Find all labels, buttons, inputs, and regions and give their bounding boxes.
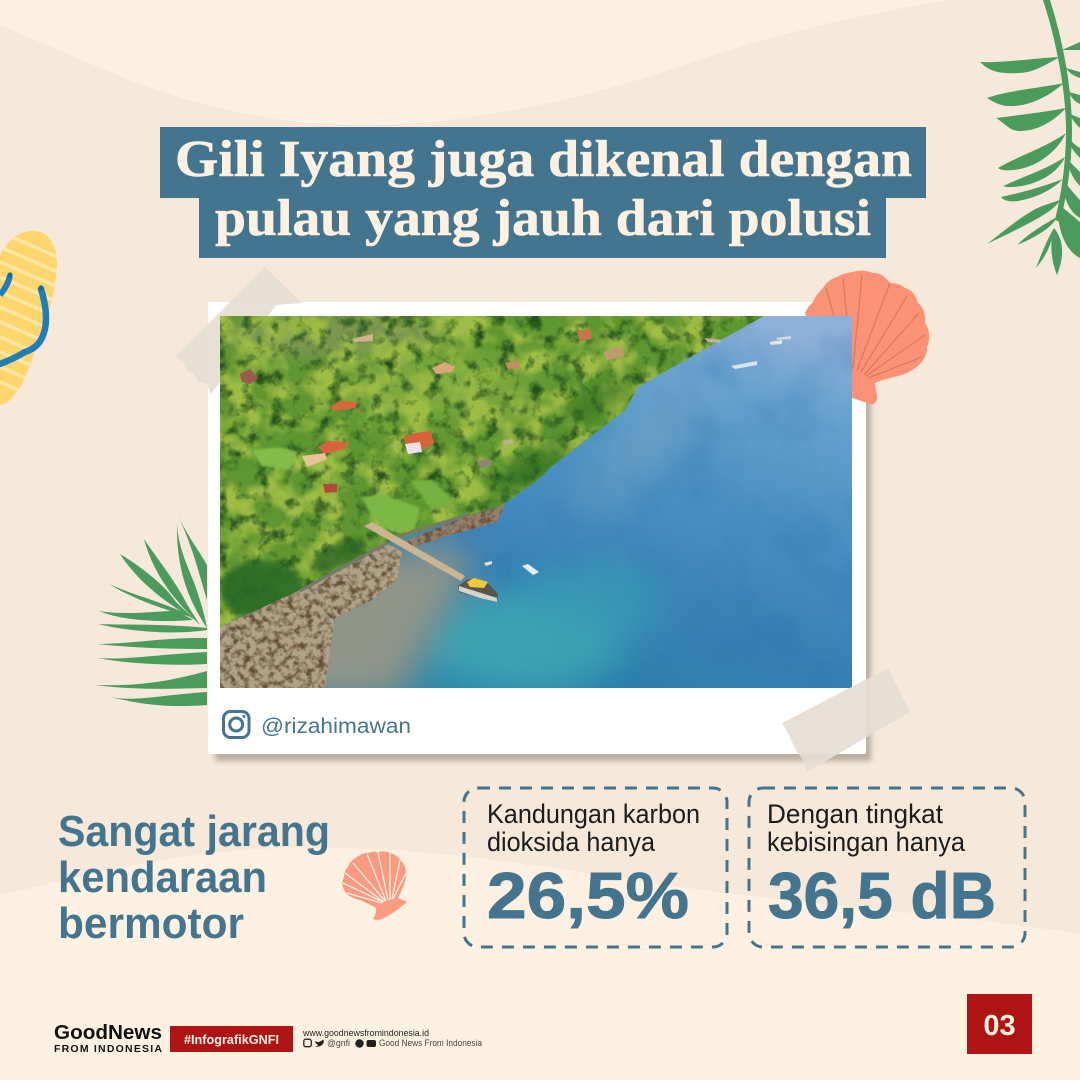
decoration: small shell: [342, 851, 407, 920]
shallow water: [220, 545, 470, 700]
dark shoreline trees: [220, 560, 304, 620]
moored boat: [458, 578, 498, 602]
lawns: [252, 447, 453, 532]
photo: aerial view of the island coast: [220, 313, 852, 700]
decoration: palm leaf left: [95, 516, 207, 706]
page number: [967, 994, 1032, 1054]
icon: youtube: [366, 1040, 376, 1047]
pier: [364, 522, 465, 581]
stat panel: noise level: 36,5 dB: [768, 859, 996, 932]
stat panel: carbon dioxide: [464, 788, 727, 947]
title: [160, 127, 926, 258]
page number: 03: [983, 1010, 1016, 1042]
footer logo: [54, 1022, 162, 1055]
heading: rarely motor vehicles: kendaraan: [58, 853, 267, 902]
stat panel: noise level: Dengan tingkat: [767, 799, 943, 829]
title line 1: Gili Iyang juga dikenal dengan: [175, 131, 912, 188]
hashtag badge: [170, 1026, 293, 1052]
footer contact info: @gnfi: [327, 1038, 350, 1049]
stat panel: carbon dioxide: Kandungan karbon: [487, 799, 700, 829]
stat panel: carbon dioxide: dioksida hanya: [487, 827, 656, 857]
houses: [240, 329, 624, 493]
footer logo: GoodNews: [54, 1022, 162, 1044]
sea: [220, 316, 852, 688]
title line 2: pulau yang jauh dari polusi: [215, 190, 871, 247]
decoration: large shell: [805, 271, 929, 404]
photo card shadow: [215, 310, 871, 761]
title line 1 band: [160, 127, 926, 198]
decoration: palm leaf top right: [980, 0, 1080, 275]
land vegetation: [220, 313, 780, 636]
footer contact info: Good News From Indonesia: [379, 1038, 483, 1049]
heading: rarely motor vehicles: bermotor: [58, 899, 244, 948]
footer contact info: www.goodnewsfromindonesia.id: [302, 1028, 429, 1039]
icon: facebook: [355, 1039, 364, 1048]
hashtag badge: #InfografikGNFI: [184, 1032, 279, 1047]
stat panel: noise level: [749, 788, 1025, 947]
icon: twitter: [315, 1040, 324, 1047]
title line 2 band: [199, 197, 886, 258]
tape: top left: [175, 267, 302, 394]
photo card: [208, 302, 866, 754]
photo credit: @rizahimawan: [261, 715, 411, 738]
reef rocks: [220, 500, 510, 690]
heading: rarely motor vehicles: [58, 807, 330, 948]
stat panel: carbon dioxide: 26,5%: [487, 859, 689, 932]
coastal wall: [300, 514, 470, 591]
decoration: flip-flop: [0, 231, 60, 408]
heading: rarely motor vehicles: Sangat jarang: [58, 807, 330, 856]
stat panel: noise level: kebisingan hanya: [767, 827, 966, 857]
footer contact info: [302, 1028, 483, 1049]
icon: instagram: [224, 712, 249, 738]
icon: instagram small: [304, 1039, 311, 1047]
footer logo: FROM INDONESIA: [54, 1043, 162, 1055]
tape: bottom right: [782, 668, 910, 772]
small boats: [484, 336, 791, 575]
